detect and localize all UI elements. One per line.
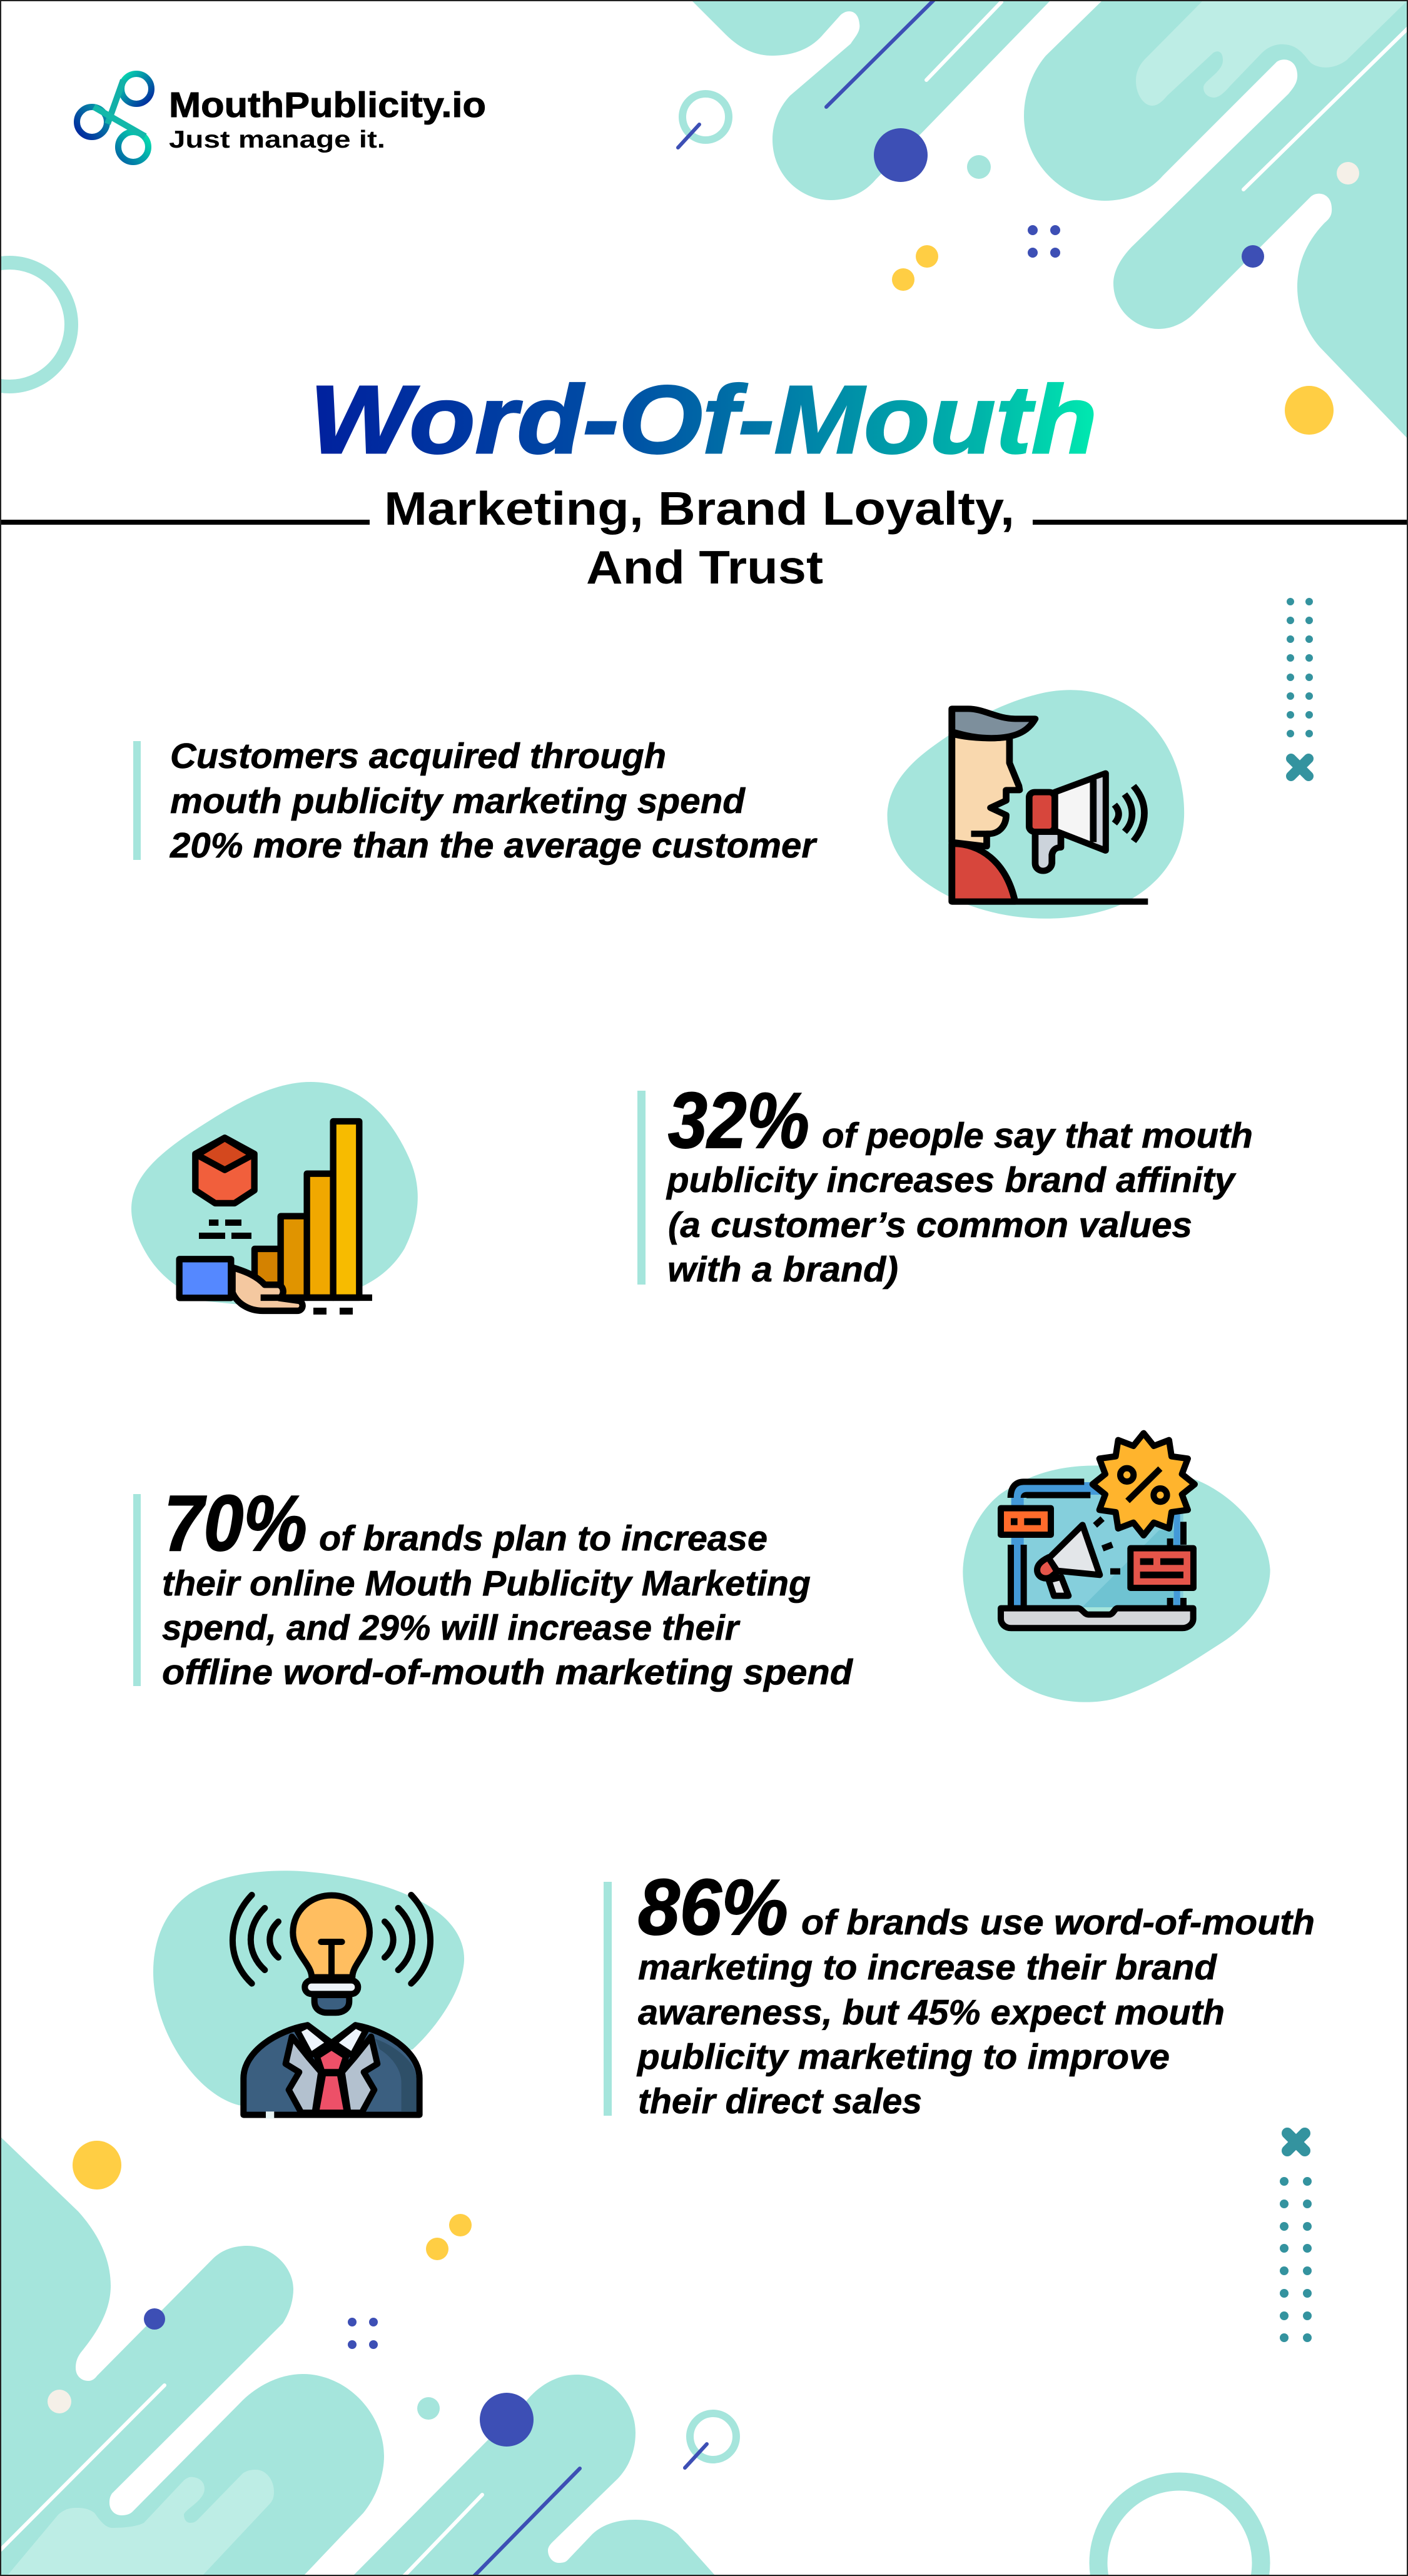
panel: 20% stat [133,736,818,866]
subtitle [0,482,1408,593]
stat text: marketing to increase their brand [638,1947,1217,1988]
icon: businessman with light bulb head [153,1871,464,2119]
stat text: offline word-of-mouth marketing spend [162,1652,853,1692]
top right decorative blobs [691,0,1408,439]
stat text: mouth publicity marketing spend [170,781,746,821]
stat text: of brands use word-of-mouth [801,1902,1315,1942]
stat text: of brands plan to increase [319,1518,767,1558]
stat text: Customers acquired through [170,736,666,776]
tagline: Just manage it. [169,126,385,153]
accent bar [133,1494,141,1686]
stat text: awareness, but 45% expect mouth [638,1993,1225,2033]
stat number: 86% [638,1863,788,1951]
icon: logo mark [77,74,151,162]
subtitle: And Trust [586,541,823,593]
top dot column with cross [1287,598,1313,776]
stat text: of people say that mouth [822,1116,1253,1156]
stat text: their direct sales [638,2081,922,2121]
icon: laptop with megaphone and discount badge [963,1433,1270,1702]
bottom left decorative blobs [0,2136,716,2576]
stat text: publicity marketing to improve [636,2037,1170,2077]
logo [77,74,486,162]
panel: 86% stat [604,1863,1315,2121]
stat text [162,1518,853,1692]
panel: 32% stat [637,1076,1253,1290]
stat text: spend, and 29% will increase their [162,1608,741,1648]
icon: growth bars with cube and hand [131,1082,418,1315]
stat number: 70% [164,1479,307,1567]
stat number: 32% [668,1076,809,1164]
bottom dot column with cross [1280,2133,1312,2342]
stat text: 20% more than the average customer [170,826,818,866]
accent bar [637,1091,646,1285]
panel: 70% stat [133,1479,853,1692]
title: Word-Of-Mouth [310,366,1097,473]
icon: man with megaphone [888,690,1184,919]
brand name: MouthPublicity.io [169,85,486,125]
accent bar [133,741,141,860]
stat text: with a brand) [667,1250,898,1290]
stat text: publicity increases brand affinity [666,1160,1237,1200]
subtitle: Marketing, Brand Loyalty, [384,482,1015,535]
accent bar [604,1882,612,2116]
top decorative dots and rings [0,94,1359,435]
bottom decorative dots and rings [48,2141,1261,2576]
stat text [636,1902,1315,2121]
stat text: (a customer’s common values [668,1205,1192,1245]
stat text: their online Mouth Publicity Marketing [162,1563,811,1604]
stat text [170,736,818,866]
stat text [666,1116,1253,1290]
